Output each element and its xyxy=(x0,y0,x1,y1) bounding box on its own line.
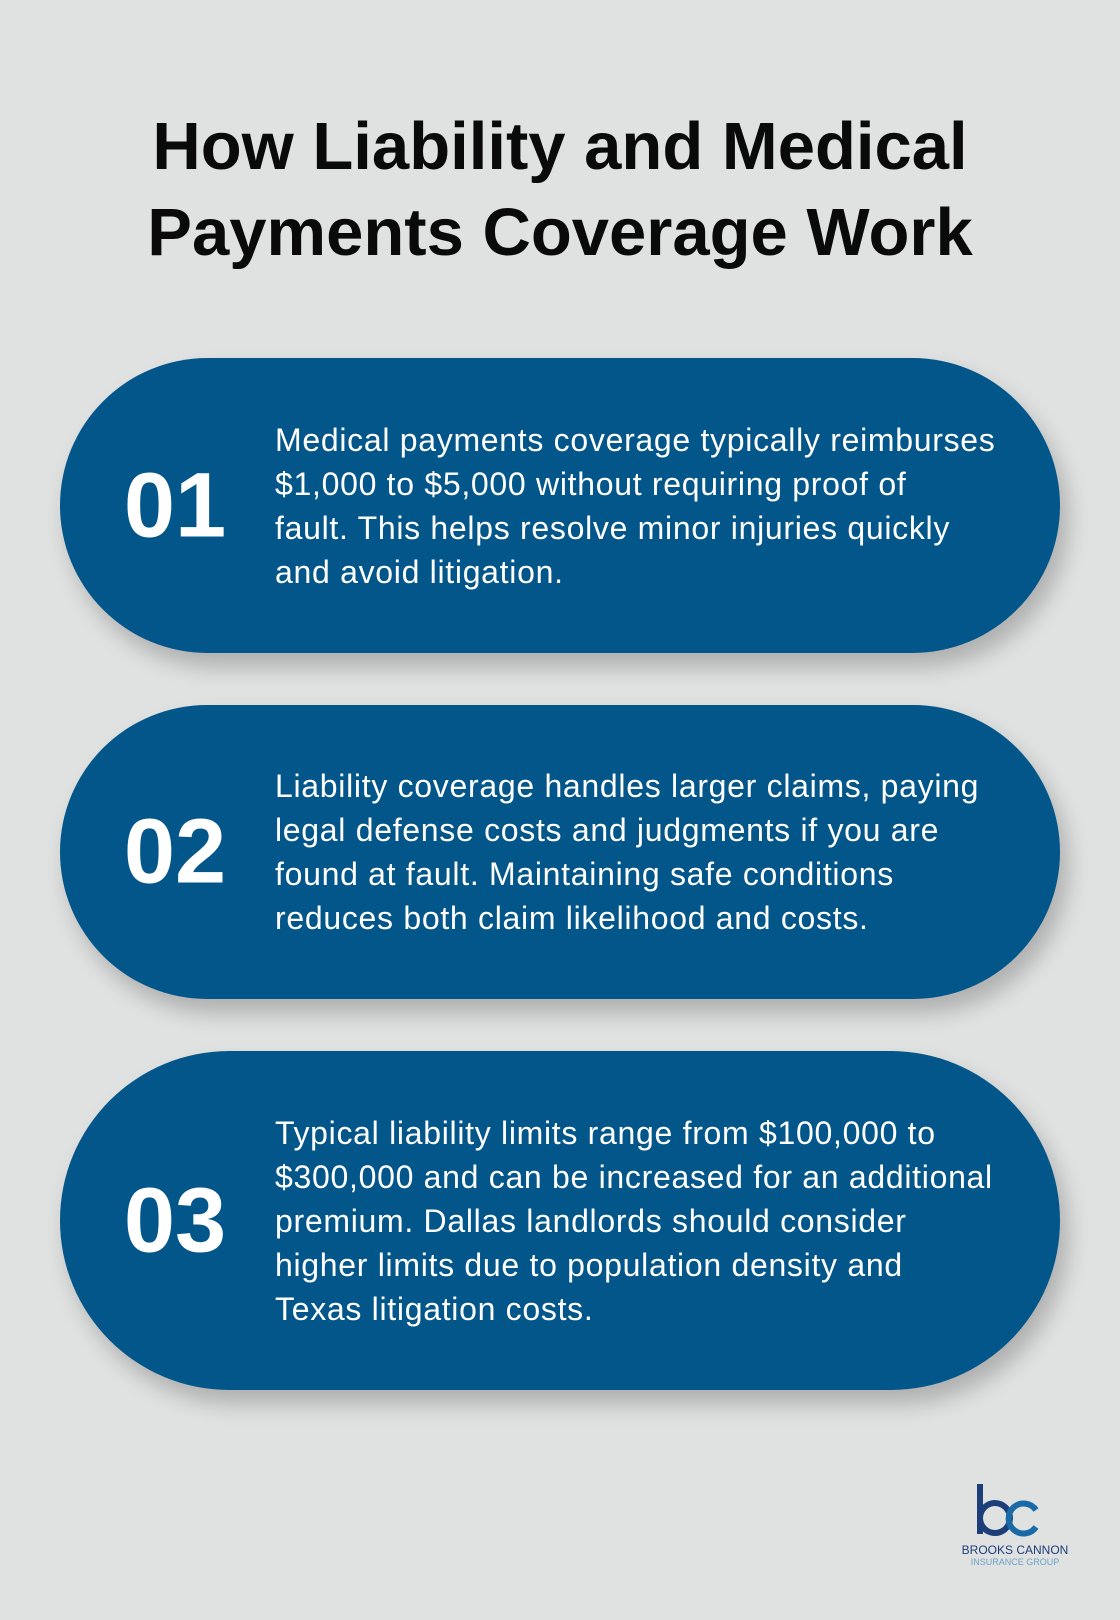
text 03: $300,000 and can be increased for an additional xyxy=(275,1158,993,1194)
text 01: fault. This helps resolve minor injuries quickly xyxy=(275,510,950,546)
text 03: Texas litigation costs. xyxy=(275,1290,593,1326)
text 03 xyxy=(275,1114,993,1326)
text 03: Typical liability limits range from $100,000 to xyxy=(275,1114,936,1150)
logo xyxy=(962,1484,1068,1567)
title: How Liability and Medical xyxy=(152,109,968,184)
text 02: legal defense costs and judgments if you are xyxy=(275,812,939,848)
logo: INSURANCE GROUP xyxy=(971,1557,1059,1567)
text 01 xyxy=(275,422,995,590)
text 02 xyxy=(275,768,979,936)
icon: bc mark xyxy=(977,1484,1038,1536)
text 03: higher limits due to population density and xyxy=(275,1246,903,1282)
text 01: Medical payments coverage typically reimburses xyxy=(275,422,995,458)
number 02: 02 xyxy=(124,800,226,902)
text 01: $1,000 to $5,000 without requiring proof of xyxy=(275,466,906,502)
text 02: Liability coverage handles larger claims, paying xyxy=(275,768,979,804)
panel: card 01 xyxy=(60,358,1060,653)
title xyxy=(147,109,973,270)
text 03: premium. Dallas landlords should consider xyxy=(275,1202,907,1238)
panel: card 02 xyxy=(60,705,1060,999)
text 01: and avoid litigation. xyxy=(275,554,564,590)
title: Payments Coverage Work xyxy=(147,195,973,270)
text 02: reduces both claim likelihood and costs. xyxy=(275,900,869,936)
number 03: 03 xyxy=(124,1169,226,1271)
text 02: found at fault. Maintaining safe conditions xyxy=(275,856,894,892)
logo: BROOKS CANNON xyxy=(962,1543,1068,1557)
panel: card 03 xyxy=(60,1051,1060,1390)
number 01: 01 xyxy=(124,454,226,556)
